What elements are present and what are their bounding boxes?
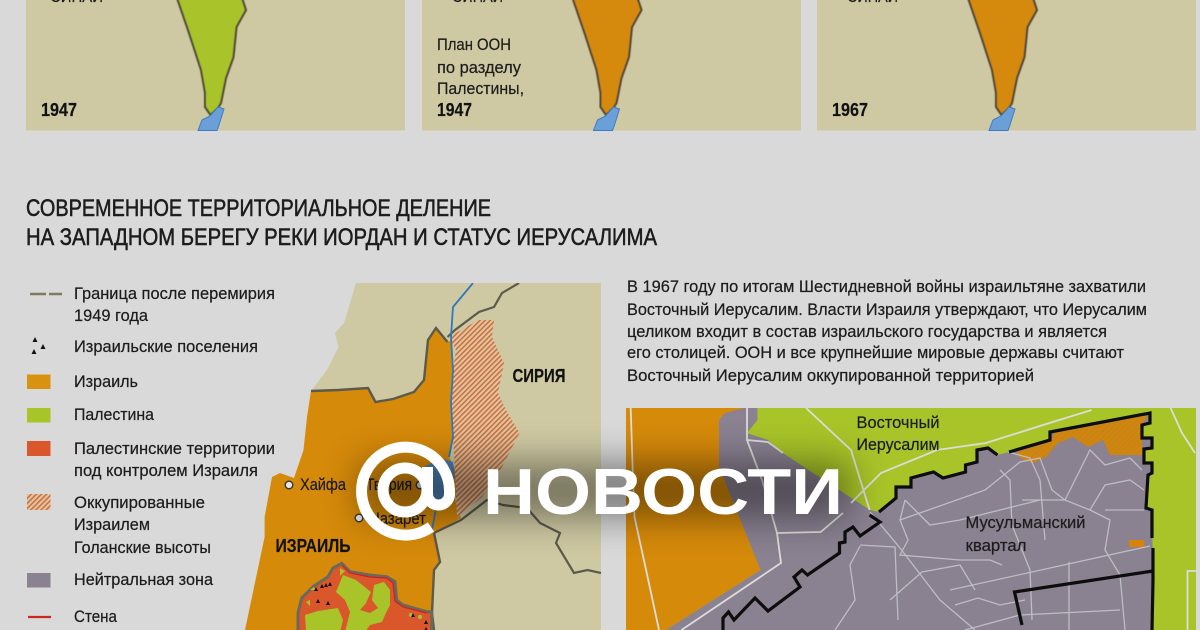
roads: old city [835,450,1150,630]
legend: wall: Стена [74,607,117,626]
heading: СОВРЕМЕННОЕ ТЕРРИТОРИАЛЬНОЕ ДЕЛЕНИЕ [26,195,491,222]
legend: occupied Golan: Оккупированные [74,493,205,512]
panel: Jerusalem map [626,408,1196,630]
label: East Jerusalem [856,413,940,454]
legend: Palestine [27,405,154,424]
label: Syria: СИРИЯ [512,366,566,386]
text block: description [627,278,1147,385]
West Bank [298,563,432,630]
plan caption: Палестины, [437,79,524,98]
panel: UN partition plan 1947 [422,0,801,130]
roads: light [631,408,1196,630]
Palestine zones [336,575,390,630]
legend: neutral zone: Нейтральная зона [74,570,214,589]
settlements [314,582,428,630]
label: Israel: ИЗРАИЛЬ [276,536,351,556]
legend [27,284,275,626]
legend: Palestine: Палестина [74,405,154,424]
city wall: black boundary [723,413,1153,630]
legend: Israel: Израиль [74,372,138,391]
text block: description: целиком входит в состав израильского государства и является [627,323,1107,341]
Dead Sea [198,107,224,130]
panel: regional map [245,283,601,630]
wordmark: НОВОСТИ [483,455,843,528]
legend: occupied Golan: Израилем [74,515,150,534]
Israel orange zone [626,408,760,630]
text block: description: Восточный Иерусалим. Власти Израиля утверждают, что Иерусалим [627,301,1147,319]
East Jerusalem green base [626,408,1196,630]
territory shape: partition plan [572,0,642,115]
legend: armistice border: 1949 года [74,306,149,325]
legend: occupied Golan: Голанские высоты [74,538,211,557]
legend: Israel [27,372,138,391]
border: armistice line [311,328,448,630]
legend: armistice border [30,284,275,325]
icon: at sign [362,447,450,535]
plan caption: 1947 [437,100,472,120]
text block: description: Восточный Иерусалим оккупированной территорией [627,367,1034,385]
neutral zone gray [666,408,1153,630]
logo: Novosti [362,447,843,535]
city: Tiberias: Тверия [366,475,412,494]
legend: armistice border: Граница после перемирия [74,284,275,303]
legend: controlled territories [27,439,275,480]
panel: map 1947 [26,0,405,130]
borders: Syria [434,283,601,573]
label: East Jerusalem: Иерусалим [856,435,940,454]
city: Nazareth: Назарет [369,509,426,528]
river Jordan [432,283,473,530]
land: neighbouring countries [311,283,601,630]
legend: wall [28,607,117,626]
year label: 1947 [41,100,77,120]
logo shadow [360,462,850,518]
label: Muslim Quarter [966,513,1086,555]
territory: Israel [245,328,461,630]
legend: controlled territories: под контролем Израиля [74,461,258,480]
legend: controlled territories: Палестинские территории [74,439,275,458]
label: East Jerusalem: Восточный [856,413,940,432]
city: Haifa [285,475,346,494]
heading [26,195,657,251]
legend: occupied Golan [27,493,211,557]
label: Muslim Quarter: Мусульманский [966,513,1086,532]
label: Muslim Quarter: квартал [966,536,1026,555]
territory shape: 1967 [968,0,1037,115]
text block: description: В 1967 году по итогам Шестидневной войны израильтяне захватили [627,278,1146,296]
city: Nazareth [354,512,426,528]
Golan Heights hatching [449,320,520,518]
year label: 1967 [832,100,868,120]
plan caption: по разделу [437,58,521,77]
legend: settlements: Израильские поселения [74,337,258,356]
plan caption: План ООН [437,35,511,54]
Israeli zones hatched [1016,415,1148,463]
territory shape: Palestine 1947 [177,0,246,115]
Dead Sea [989,107,1015,130]
Dead Sea [594,107,620,130]
text block: description: его столицей. ООН и все крупнейшие мировые державы считают [627,344,1124,362]
city: Haifa: Хайфа [300,475,346,494]
heading: НА ЗАПАДНОМ БЕРЕГУ РЕКИ ИОРДАН И СТАТУС ИЕРУСАЛИМА [26,224,657,251]
Sea of Galilee [424,458,455,503]
plan caption [437,35,524,120]
panel: map 1967 [817,0,1196,130]
